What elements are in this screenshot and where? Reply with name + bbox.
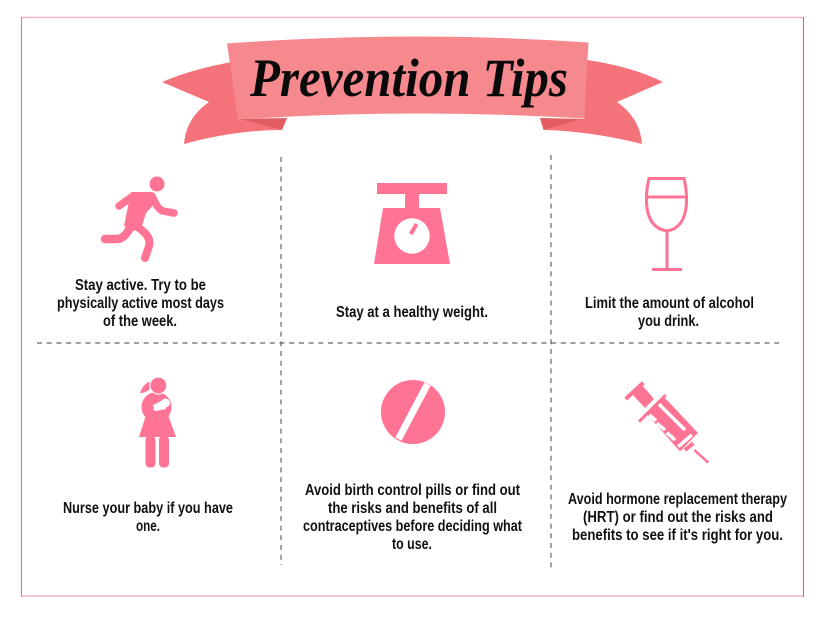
text: healthy weight: Stay at a healthy weight. xyxy=(336,304,488,321)
ribbon right tail xyxy=(544,60,663,144)
title ribbon xyxy=(162,36,663,144)
text: nurse baby: one. xyxy=(136,518,160,535)
icon: syringe xyxy=(626,383,708,463)
text: birth control: Avoid birth control pills or find out xyxy=(305,482,520,499)
tip: birth control xyxy=(303,380,522,553)
text: stay active: of the week. xyxy=(103,313,177,330)
text: birth control: contraceptives before deciding what xyxy=(303,518,522,535)
icon: mother and baby xyxy=(139,377,176,468)
text: hormone therapy xyxy=(568,491,787,544)
tip: stay active xyxy=(57,176,224,330)
ribbon centre band xyxy=(227,36,588,119)
text: limit alcohol xyxy=(585,295,754,330)
tip: limit alcohol xyxy=(585,178,754,330)
icon: wine glass xyxy=(646,178,687,270)
ribbon left fold xyxy=(238,118,287,130)
text: hormone therapy: benefits to see if it's right for you. xyxy=(572,527,783,544)
text: nurse baby xyxy=(63,500,233,535)
text: hormone therapy: (HRT) or find out the risks and xyxy=(583,509,773,526)
title: Prevention Tips xyxy=(249,48,568,108)
icon: scale xyxy=(374,183,450,264)
tip: hormone therapy xyxy=(568,383,787,544)
tip: nurse baby xyxy=(63,377,233,535)
text: birth control xyxy=(303,482,522,553)
icon: runner xyxy=(105,176,174,258)
text: limit alcohol: Limit the amount of alcohol xyxy=(585,295,754,312)
ribbon left tail xyxy=(162,61,282,144)
text: stay active xyxy=(57,277,224,330)
tip: healthy weight xyxy=(336,183,488,321)
icon: pill xyxy=(381,380,445,444)
text: nurse baby: Nurse your baby if you have xyxy=(63,500,233,517)
text: birth control: the risks and benefits of all xyxy=(328,500,497,517)
text: stay active: Stay active. Try to be xyxy=(75,277,206,294)
text: birth control: to use. xyxy=(392,536,432,553)
dashed grid dividers xyxy=(37,155,782,570)
text: stay active: physically active most days xyxy=(57,295,224,312)
ribbon right fold xyxy=(540,118,584,130)
text: limit alcohol: you drink. xyxy=(638,313,699,330)
